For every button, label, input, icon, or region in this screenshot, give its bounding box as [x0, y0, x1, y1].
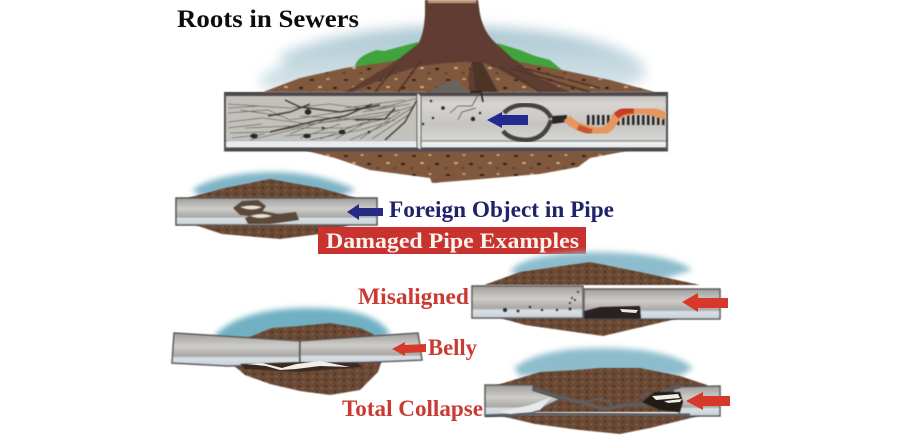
- illustration: total collapse pipe: [485, 348, 730, 434]
- arrow: red: [682, 293, 728, 312]
- arrow: blue direction: [487, 112, 528, 128]
- root mass in pipe: [227, 97, 418, 144]
- soil above pipe: [263, 60, 655, 92]
- arrow: blue: [347, 204, 383, 220]
- tree trunk and roots: [345, 0, 600, 92]
- soil gaps between roots: [425, 64, 468, 92]
- cracks and debris: [422, 95, 481, 125]
- banner: damaged pipe examples: Damaged Pipe Examples: [326, 228, 579, 253]
- cutter head: [503, 105, 551, 140]
- title: Roots in Sewers: [177, 6, 359, 33]
- label: belly: Belly: [428, 335, 477, 360]
- soil below pipe: [303, 150, 627, 183]
- illustration: foreign object pipe: [176, 172, 383, 239]
- sky behind tree: [258, 27, 646, 90]
- pipe walls and joint: [224, 92, 668, 152]
- illustration: belly pipe: [172, 308, 426, 395]
- label: misaligned: Misaligned: [358, 284, 469, 309]
- label: total collapse: Total Collapse: [342, 396, 483, 421]
- arrow: red: [392, 342, 426, 356]
- pipe body: [224, 92, 668, 151]
- illustration: misaligned pipe: [472, 252, 728, 336]
- grass: [355, 42, 562, 70]
- illustration: main pipe with tree roots: [224, 0, 668, 183]
- drain cable: [552, 110, 665, 132]
- label: foreign object in pipe: Foreign Object in Pipe: [389, 197, 614, 223]
- arrow: red: [686, 392, 730, 410]
